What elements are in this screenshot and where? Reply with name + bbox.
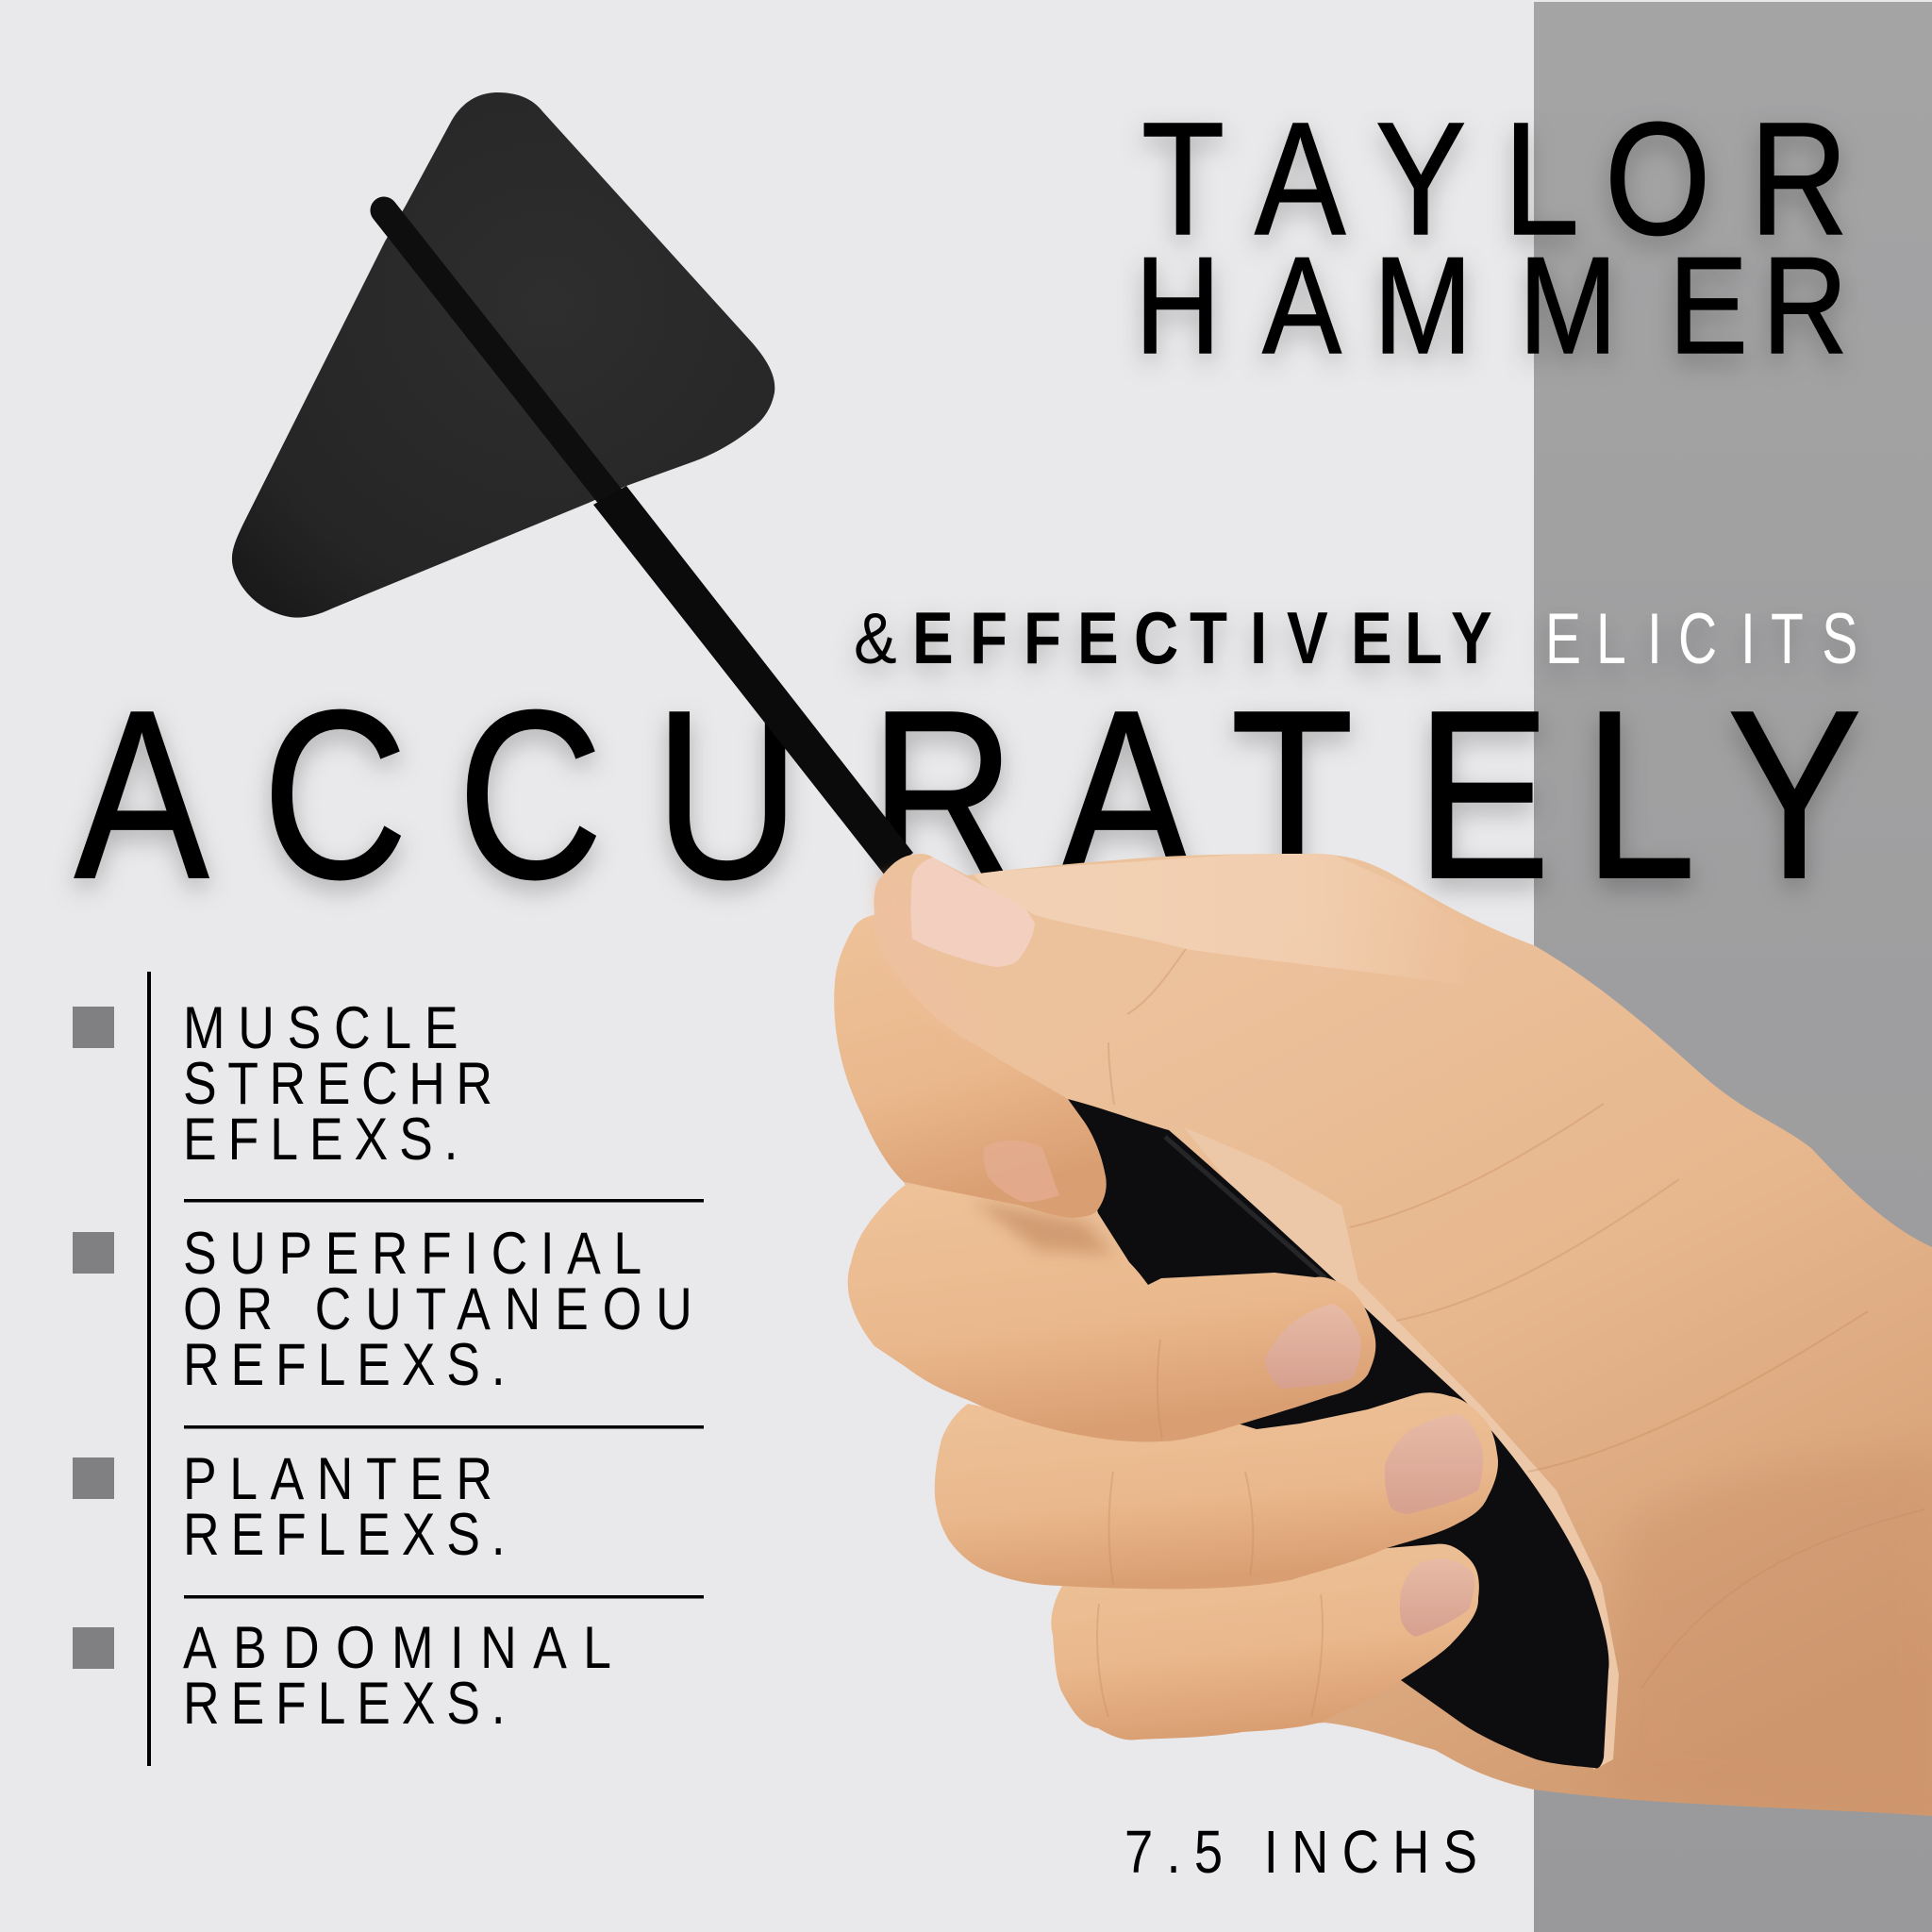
icon: rubber band edge xyxy=(384,210,611,498)
hammer head and shaft xyxy=(232,92,913,875)
vertical divider xyxy=(147,972,151,1766)
item: planter reflexes: REFLEXS. xyxy=(183,1502,506,1568)
hand gripping the hammer xyxy=(834,849,1932,1830)
headline: accurately: ACCURATELY xyxy=(75,660,1862,928)
handle highlight xyxy=(1165,1137,1325,1278)
item: muscle stretch reflexes xyxy=(73,995,704,1202)
reflex list xyxy=(73,972,704,1766)
item: muscle stretch reflexes: MUSCLE xyxy=(183,995,458,1061)
title: Taylor Hammer: HAMMER xyxy=(1135,228,1848,382)
subheading: & effectively elicits xyxy=(854,598,1857,679)
item: planter reflexes xyxy=(73,1446,704,1598)
thumb pink tip xyxy=(875,873,980,1047)
thumb nail xyxy=(911,858,1035,967)
subheading: & effectively elicits: & xyxy=(854,600,897,679)
item: superficial or cutaneous reflexes: OR CUTANEOU xyxy=(183,1276,692,1342)
title: Taylor Hammer xyxy=(1135,90,1848,382)
item: superficial or cutaneous reflexes: SUPERFICIAL xyxy=(183,1221,641,1287)
item: muscle stretch reflexes: EFLEXS. xyxy=(183,1107,458,1173)
pale palm strip beside handle xyxy=(1184,1127,1619,1770)
index finger xyxy=(834,915,1107,1218)
middle finger xyxy=(848,1186,1375,1441)
item: abdominal reflexes xyxy=(73,1615,611,1737)
icon: triangular hammer head xyxy=(232,92,774,618)
item: planter reflexes: PLANTER xyxy=(183,1446,492,1512)
title: Taylor Hammer: TAYLOR xyxy=(1141,90,1848,269)
middle nail xyxy=(1264,1304,1361,1389)
size label: 7.5 inches: 7.5 INCHS xyxy=(1124,1818,1477,1886)
ring nail xyxy=(1385,1414,1483,1514)
pinky nail xyxy=(1400,1558,1474,1637)
ring finger xyxy=(935,1392,1498,1589)
item: superficial or cutaneous reflexes: REFLEXS. xyxy=(183,1332,506,1398)
subheading: & effectively elicits: ELICITS xyxy=(1545,599,1857,679)
knuckle and palm creases xyxy=(1097,949,1924,1717)
back of hand highlight and lower shading xyxy=(972,849,1932,1830)
icon: hammer shaft xyxy=(593,486,913,875)
hammer handle xyxy=(1068,1099,1609,1769)
palm and back of hand xyxy=(874,854,1932,1816)
pinky finger xyxy=(1051,1544,1479,1740)
grey side panel xyxy=(1534,2,1932,1932)
item: abdominal reflexes: REFLEXS. xyxy=(183,1671,506,1737)
item: superficial or cutaneous reflexes xyxy=(73,1221,704,1428)
item: muscle stretch reflexes: STRECHR xyxy=(183,1051,492,1117)
index nail xyxy=(983,1141,1059,1202)
subheading: & effectively elicits: EFFECTIVELY xyxy=(912,598,1492,679)
thumb xyxy=(874,854,1623,1281)
item: abdominal reflexes: ABDOMINAL xyxy=(183,1615,611,1681)
crease shadow below index finger xyxy=(972,1200,1113,1255)
